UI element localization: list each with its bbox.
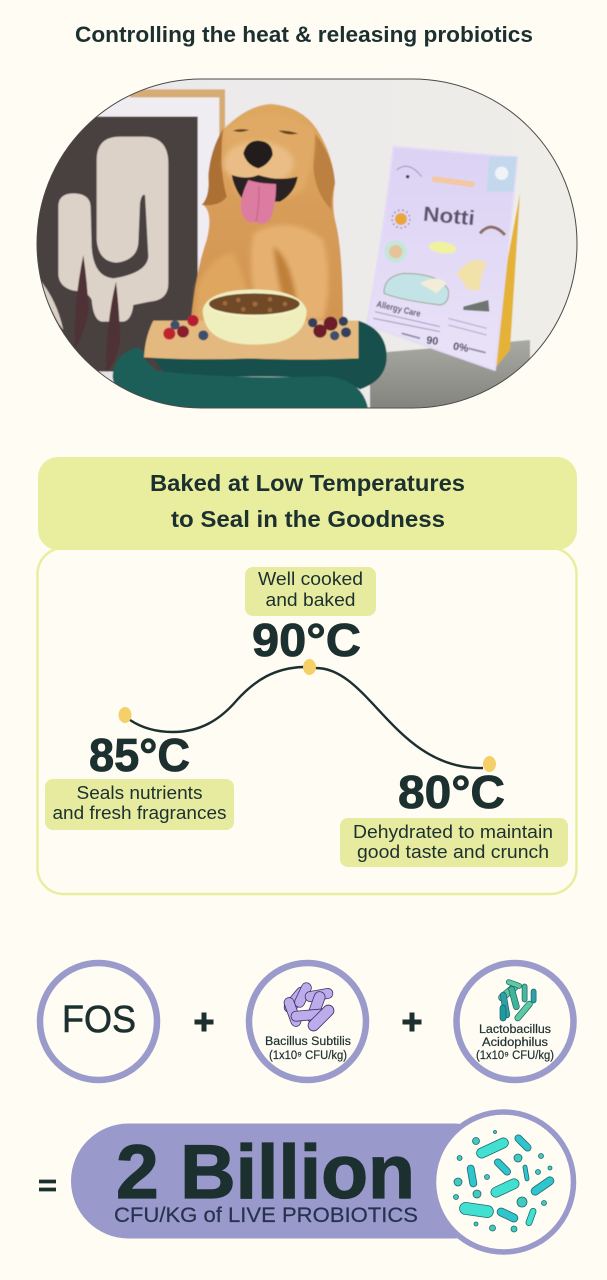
label: well cooked and baked: and baked xyxy=(266,590,356,610)
label: dehydrated xyxy=(340,818,568,867)
label: dehydrated: Dehydrated to maintain xyxy=(353,822,553,842)
product bag: 0% xyxy=(452,340,470,355)
label: well cooked and baked: Well cooked xyxy=(258,569,363,589)
result pill: 2 billion CFU/KG xyxy=(71,1124,511,1238)
label: seals nutrients xyxy=(45,779,234,830)
stone base xyxy=(370,340,530,408)
product bag: 90 xyxy=(426,334,439,348)
result pill: 2 billion CFU/KG: CFU/KG of LIVE PROBIOTICS xyxy=(114,1204,418,1227)
heading banner xyxy=(38,457,577,550)
value: 85C: 85°C xyxy=(89,729,190,781)
plus sign xyxy=(402,1012,422,1032)
value: 80C: 80°C xyxy=(398,766,505,818)
circle: FOS xyxy=(40,963,157,1080)
result pill: 2 billion CFU/KG: 2 Billion xyxy=(116,1130,415,1215)
label: dehydrated: good taste and crunch xyxy=(357,842,549,862)
circle: Bacillus Subtilis: (1x10⁹ CFU/kg) xyxy=(269,1050,347,1062)
cushion, board, bowl and berries xyxy=(113,289,387,410)
circle: FOS: FOS xyxy=(62,999,136,1041)
circle: Lactobacillus Acidophilus: Acidophilus xyxy=(482,1037,548,1049)
panel: baked at low temperatures chart xyxy=(38,548,576,894)
picture frame and poster xyxy=(30,89,225,390)
product bag: Notti xyxy=(422,203,476,230)
dog xyxy=(190,104,343,330)
heading banner: to Seal in the Goodness xyxy=(171,506,445,532)
point: 90C xyxy=(303,659,316,675)
circle: Lactobacillus Acidophilus: (1x10⁹ CFU/kg) xyxy=(476,1050,554,1062)
plus sign xyxy=(194,1012,214,1032)
photo: happy dog with food bowl and Notti bag xyxy=(30,79,577,410)
value: 90C: 90°C xyxy=(252,614,361,666)
label: seals nutrients: Seals nutrients xyxy=(76,783,202,803)
circle: Bacillus Subtilis xyxy=(249,963,366,1080)
circle: Lactobacillus Acidophilus: Lactobacillus xyxy=(479,1024,551,1036)
point: 80C xyxy=(483,756,496,772)
point: 85C xyxy=(118,707,132,723)
title: Controlling the heat & releasing probiotics xyxy=(75,22,533,47)
icon: bacillus rods xyxy=(282,981,336,1033)
heading banner: Baked at Low Temperatures xyxy=(150,470,465,496)
product bag xyxy=(367,147,520,370)
circle: probiotic microbes xyxy=(434,1112,574,1252)
equals sign xyxy=(39,1182,56,1190)
label: well cooked and baked xyxy=(245,567,376,616)
product bag: Allergy Care xyxy=(376,299,422,319)
temperature curve xyxy=(130,667,483,768)
icon: lactobacillus rods xyxy=(497,979,536,1022)
circle: Lactobacillus Acidophilus xyxy=(456,963,574,1080)
label: seals nutrients: and fresh fragrances xyxy=(52,803,226,823)
circle: Bacillus Subtilis: Bacillus Subtilis xyxy=(265,1036,351,1048)
